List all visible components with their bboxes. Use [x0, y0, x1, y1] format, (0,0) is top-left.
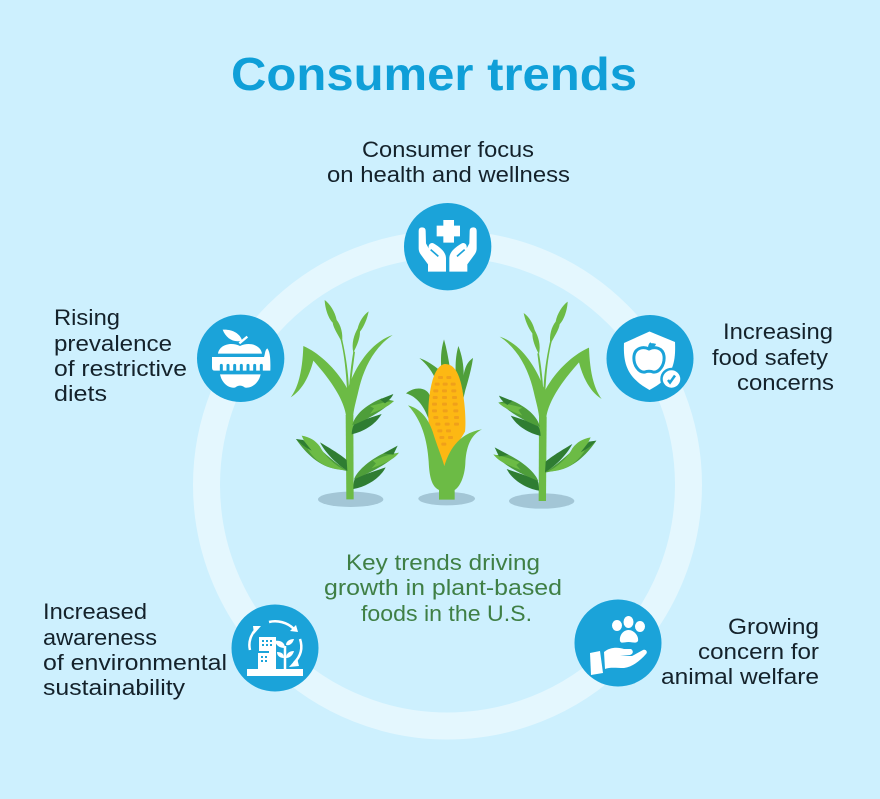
text: key trends caption — [324, 550, 562, 626]
text: consumer focus on health and wellness: Consumer focus — [362, 137, 534, 162]
text: increasing food safety concerns: food safety — [712, 345, 828, 370]
icon: hands with medical cross — [404, 203, 491, 290]
text: increased awareness of environmental sustainability — [43, 599, 227, 700]
text: rising prevalence of restrictive diets: Rising — [54, 305, 120, 330]
text: key trends caption: Key trends driving — [346, 550, 540, 575]
text: increased awareness of environmental sustainability: Increased — [43, 599, 147, 624]
text: rising prevalence of restrictive diets: prevalence — [54, 331, 172, 356]
icon: apple with measuring tape — [197, 315, 284, 402]
icon: hand holding paw — [574, 600, 662, 686]
icon: buildings, plant and cycle arrows — [232, 604, 318, 692]
text: key trends caption: foods in the U.S. — [361, 601, 532, 626]
text: increased awareness of environmental sustainability: of environmental — [43, 650, 227, 675]
text: rising prevalence of restrictive diets: diets — [54, 381, 107, 406]
icon: shield with apple and check — [606, 315, 694, 402]
text: consumer focus on health and wellness — [327, 137, 570, 187]
illustration: right corn plant — [493, 302, 602, 509]
illustration: corn cob — [406, 339, 482, 505]
text: rising prevalence of restrictive diets: of restrictive — [54, 356, 187, 381]
title: Consumer trends — [231, 48, 637, 100]
text: growing concern for animal welfare — [661, 614, 819, 689]
text: key trends caption: growth in plant-based — [324, 575, 562, 600]
text: increasing food safety concerns: concerns — [737, 370, 834, 395]
text: growing concern for animal welfare: concern for — [698, 639, 819, 664]
text: increasing food safety concerns: Increasing — [723, 319, 833, 344]
text: increasing food safety concerns — [712, 319, 834, 395]
illustration: left corn plant — [291, 300, 399, 507]
text: rising prevalence of restrictive diets — [54, 305, 187, 406]
ring — [206, 244, 688, 726]
text: growing concern for animal welfare: animal welfare — [661, 664, 819, 689]
text: consumer focus on health and wellness: on health and wellness — [327, 162, 570, 187]
text: increased awareness of environmental sustainability: awareness — [43, 625, 157, 650]
text: growing concern for animal welfare: Growing — [728, 614, 819, 639]
text: increased awareness of environmental sustainability: sustainability — [43, 675, 185, 700]
